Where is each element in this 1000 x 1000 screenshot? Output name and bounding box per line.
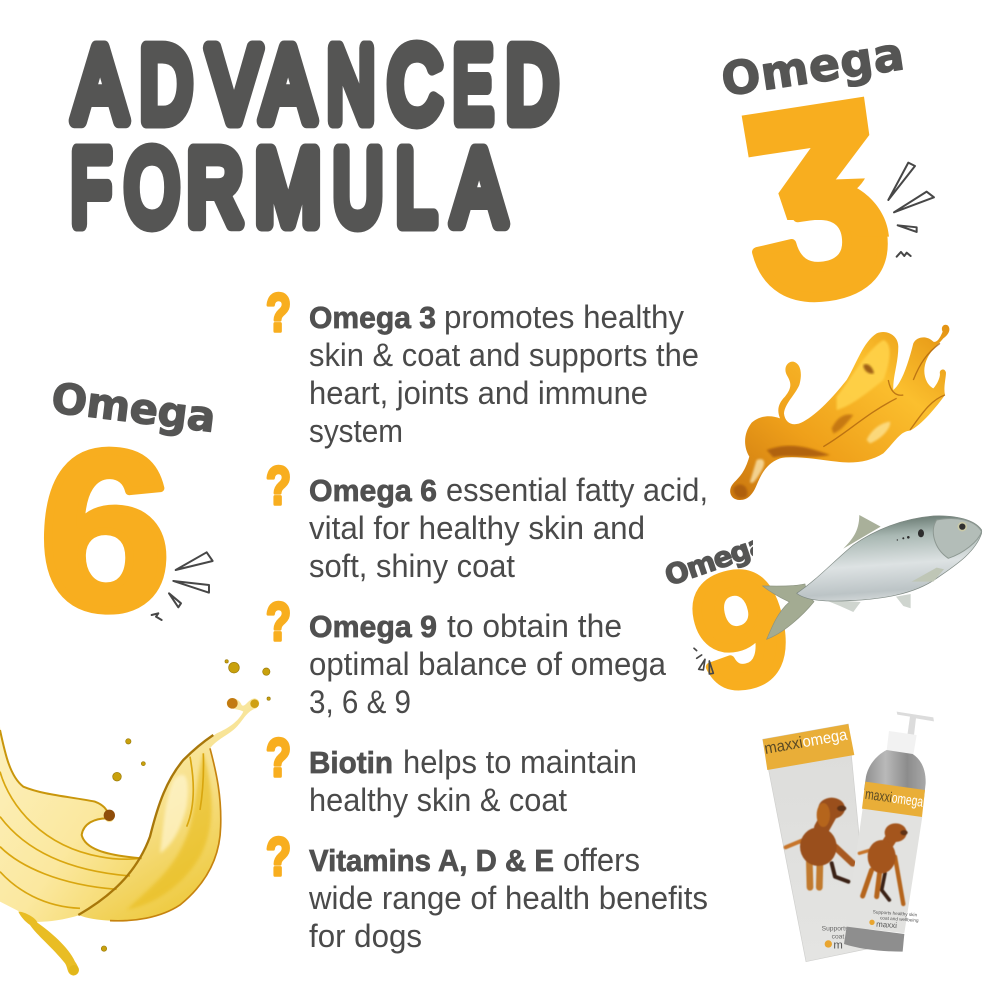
oil droplets bbox=[101, 660, 270, 951]
question mark icon: ? bbox=[266, 827, 291, 887]
item: Omega 9 bbox=[266, 592, 666, 720]
title: Advanced Formula: O bbox=[125, 129, 179, 247]
product box bbox=[763, 724, 870, 962]
Omega 6 label: Omega bbox=[49, 373, 219, 442]
Omega 9 numeral: 9 bbox=[678, 534, 803, 725]
bottle small text: Supports healthy skin bbox=[873, 909, 918, 917]
ventral fins bbox=[823, 594, 911, 612]
title: Advanced Formula: A bbox=[453, 129, 505, 247]
product: box and bottle: maxxi bbox=[876, 920, 897, 930]
Vitamins description: wide range of health benefits bbox=[308, 880, 708, 916]
Vitamins description: for dogs bbox=[309, 918, 422, 954]
Omega 9 badge bbox=[666, 540, 786, 690]
item: Biotin bbox=[266, 728, 637, 818]
amber oil splash bbox=[730, 325, 949, 500]
Omega 9 emphasis marks bbox=[694, 648, 713, 674]
title: Advanced Formula: M bbox=[255, 129, 321, 247]
bottle logo: maxxiomega bbox=[864, 787, 925, 811]
title: Advanced Formula: A bbox=[262, 26, 314, 144]
product box: coat bbox=[832, 934, 844, 941]
Vitamins description bbox=[308, 842, 708, 954]
Omega 3 description: heart, joints and immune bbox=[309, 375, 648, 411]
title: Advanced Formula: D bbox=[140, 26, 192, 144]
Omega 6 description bbox=[309, 472, 708, 584]
tail fin bbox=[763, 584, 814, 639]
body spots bbox=[897, 529, 924, 541]
title: Advanced Formula: A bbox=[74, 26, 126, 144]
title: Advanced Formula: U bbox=[333, 129, 383, 247]
yellow oil splash bbox=[0, 660, 270, 976]
Omega 9 label, partly cut off: Omega bbox=[661, 527, 772, 593]
box small text: Supports bbox=[822, 926, 849, 933]
Omega 6 description: Omega 6 bbox=[309, 473, 437, 508]
gill and head bbox=[933, 518, 982, 558]
product: box and bottle: coat and wellbeing bbox=[880, 915, 919, 923]
Omega 9 description: 3, 6 & 9 bbox=[309, 684, 411, 720]
dorsal fin bbox=[843, 515, 881, 549]
bottle shoulder bbox=[864, 750, 926, 798]
Omega 9 description: to obtain the bbox=[447, 608, 622, 644]
Omega 3 emphasis marks bbox=[888, 163, 934, 257]
Omega 9 description bbox=[309, 608, 666, 720]
Omega 9 description: optimal balance of omega bbox=[309, 646, 666, 682]
bottle pump bbox=[897, 712, 934, 747]
strand lines bbox=[0, 753, 204, 908]
Biotin description: helps to maintain bbox=[403, 744, 637, 780]
title: Advanced Formula: F bbox=[71, 129, 111, 247]
bottle body bbox=[846, 808, 922, 933]
Omega 3 description: skin & coat and supports the bbox=[309, 337, 699, 373]
Omega 6 emphasis marks bbox=[152, 552, 213, 620]
fish body bbox=[797, 516, 982, 601]
title: Advanced Formula: D bbox=[506, 26, 558, 144]
Omega 6 badge bbox=[35, 373, 219, 659]
right sheet bbox=[78, 698, 259, 921]
box dog bbox=[786, 798, 853, 887]
Omega 6 description: soft, shiny coat bbox=[309, 548, 515, 584]
Omega 6 description: vital for healthy skin and bbox=[309, 510, 645, 546]
Biotin description: healthy skin & coat bbox=[309, 782, 567, 818]
Biotin description bbox=[309, 744, 637, 818]
bottle base bbox=[844, 927, 904, 952]
title: Advanced Formula: R bbox=[187, 129, 243, 247]
product box: m bbox=[833, 939, 843, 951]
bottle dog bbox=[859, 823, 908, 904]
product: box and bottle bbox=[763, 712, 934, 962]
item: Omega 3 bbox=[266, 283, 699, 449]
Omega 3 description: Omega 3 bbox=[309, 300, 436, 335]
lower left sheet bbox=[0, 727, 142, 922]
drip tail bbox=[18, 912, 79, 976]
question mark icon: ? bbox=[266, 283, 291, 343]
title: Advanced Formula: V bbox=[208, 26, 260, 144]
question mark icon: ? bbox=[266, 456, 291, 516]
title: Advanced Formula: C bbox=[388, 26, 442, 144]
title: Advanced Formula: E bbox=[453, 26, 493, 144]
title: Advanced Formula: N bbox=[327, 26, 375, 144]
box logo: maxxiomega bbox=[763, 727, 849, 758]
Omega 6 numeral: 6 bbox=[35, 401, 176, 659]
Omega 3 numeral: 3 bbox=[724, 43, 907, 360]
bottle label band bbox=[862, 782, 925, 817]
bottle collar bbox=[887, 731, 917, 755]
item: Vitamins bbox=[266, 827, 708, 954]
Omega 6 description: essential fatty acid, bbox=[446, 472, 708, 508]
fish illustration bbox=[763, 515, 982, 639]
Omega 3 description: promotes healthy bbox=[444, 299, 684, 335]
Omega 3 description bbox=[309, 299, 699, 449]
Omega 3 description: system bbox=[309, 413, 403, 449]
eye bbox=[958, 523, 966, 531]
question mark icon: ? bbox=[266, 728, 291, 788]
item: Omega 6 bbox=[266, 456, 708, 584]
benefit list bbox=[266, 283, 708, 954]
question mark icon: ? bbox=[266, 592, 291, 652]
pectoral fin bbox=[912, 568, 944, 582]
Omega 3 label: Omega bbox=[718, 26, 908, 107]
title: Advanced Formula: L bbox=[396, 129, 436, 247]
Omega 3 badge bbox=[718, 26, 934, 360]
Vitamins description: offers bbox=[563, 842, 640, 878]
Omega 9 description: Omega 9 bbox=[309, 609, 437, 644]
Biotin description: Biotin bbox=[309, 745, 393, 780]
Vitamins description: Vitamins A, D & E bbox=[309, 843, 554, 878]
Omega 3 flat top styling bbox=[730, 77, 913, 237]
title: Advanced Formula bbox=[71, 26, 558, 247]
